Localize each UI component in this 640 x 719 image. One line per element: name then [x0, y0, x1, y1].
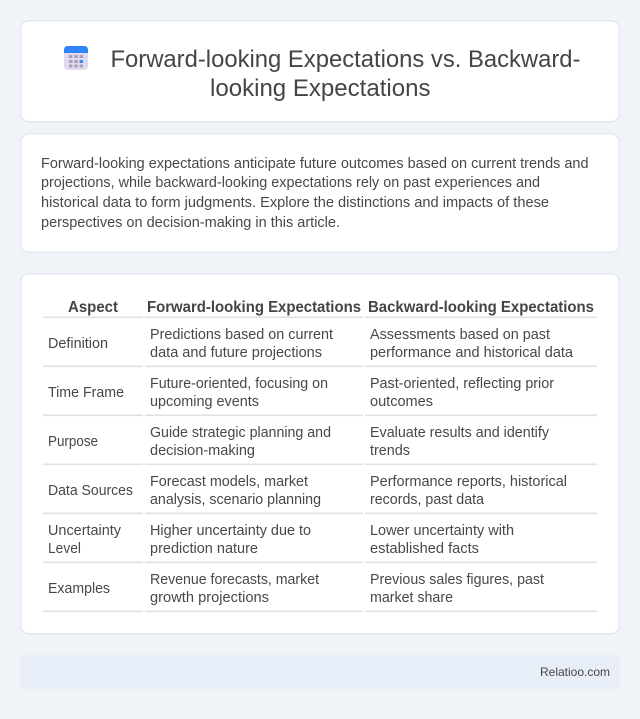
row: uncertainty level: established facts: [370, 541, 479, 557]
row: uncertainty level: Level: [48, 541, 81, 557]
intro text: projections, while backward-looking expectations rely on past experiences and: [41, 175, 540, 191]
row: data sources: analysis, scenario planning: [150, 492, 321, 508]
panel: comparison table: [21, 274, 619, 634]
row: examples: market share: [370, 590, 453, 606]
table header: [68, 299, 594, 316]
row: purpose: Evaluate results and identify: [370, 425, 550, 441]
row: data sources: records, past data: [370, 492, 484, 508]
intro text: historical data to form judgments. Explore the distinctions and impacts of these: [41, 195, 549, 211]
row: uncertainty level: prediction nature: [150, 541, 258, 557]
row: examples: Revenue forecasts, market: [150, 572, 319, 588]
intro text: perspectives on decision-making in this article.: [41, 215, 340, 231]
row: examples: [48, 572, 544, 606]
row: data sources: Data Sources: [48, 483, 133, 499]
row: purpose: Guide strategic planning and: [150, 425, 331, 441]
row: purpose: trends: [370, 443, 410, 459]
intro text: Forward-looking expectations anticipate future outcomes based on current trends and: [41, 156, 588, 172]
footer: Relatioo.com: [540, 665, 610, 679]
table header: Backward-looking Expectations: [368, 299, 594, 316]
row: uncertainty level: [48, 523, 514, 557]
title: Forward-looking Expectations vs. Backward-: [110, 46, 580, 73]
row: purpose: decision-making: [150, 443, 255, 459]
row: definition: [48, 327, 573, 361]
row: definition: data and future projections: [150, 345, 322, 361]
footer: [20, 655, 620, 689]
panel: introduction: [21, 134, 619, 252]
row: data sources: Forecast models, market: [150, 474, 308, 490]
row: purpose: Purpose: [48, 434, 98, 450]
title: [110, 46, 580, 102]
icon: calendar: [64, 46, 88, 70]
row: uncertainty level: Lower uncertainty with: [370, 523, 514, 539]
row: time frame: Time Frame: [48, 385, 124, 401]
row: definition: Definition: [48, 336, 108, 352]
row: examples: Examples: [48, 581, 110, 597]
table header: Aspect: [68, 299, 119, 316]
row: examples: growth projections: [150, 590, 269, 606]
row: data sources: Performance reports, historical: [370, 474, 567, 490]
row: time frame: outcomes: [370, 394, 433, 410]
row: data sources: [48, 474, 567, 508]
row: time frame: Future-oriented, focusing on: [150, 376, 328, 392]
row: time frame: Past-oriented, reflecting prior: [370, 376, 554, 392]
title: looking Expectations: [210, 75, 430, 102]
row: time frame: [48, 376, 554, 410]
row: purpose: [48, 425, 550, 459]
row: time frame: upcoming events: [150, 394, 259, 410]
panel: title card: [21, 21, 619, 122]
row: definition: Assessments based on past: [370, 327, 550, 343]
row: uncertainty level: Uncertainty: [48, 523, 122, 539]
row: definition: performance and historical data: [370, 345, 573, 361]
intro text: [41, 156, 588, 231]
table header: Forward-looking Expectations: [147, 299, 361, 316]
row: uncertainty level: Higher uncertainty due to: [150, 523, 311, 539]
row: examples: Previous sales figures, past: [370, 572, 544, 588]
row: definition: Predictions based on current: [150, 327, 333, 343]
